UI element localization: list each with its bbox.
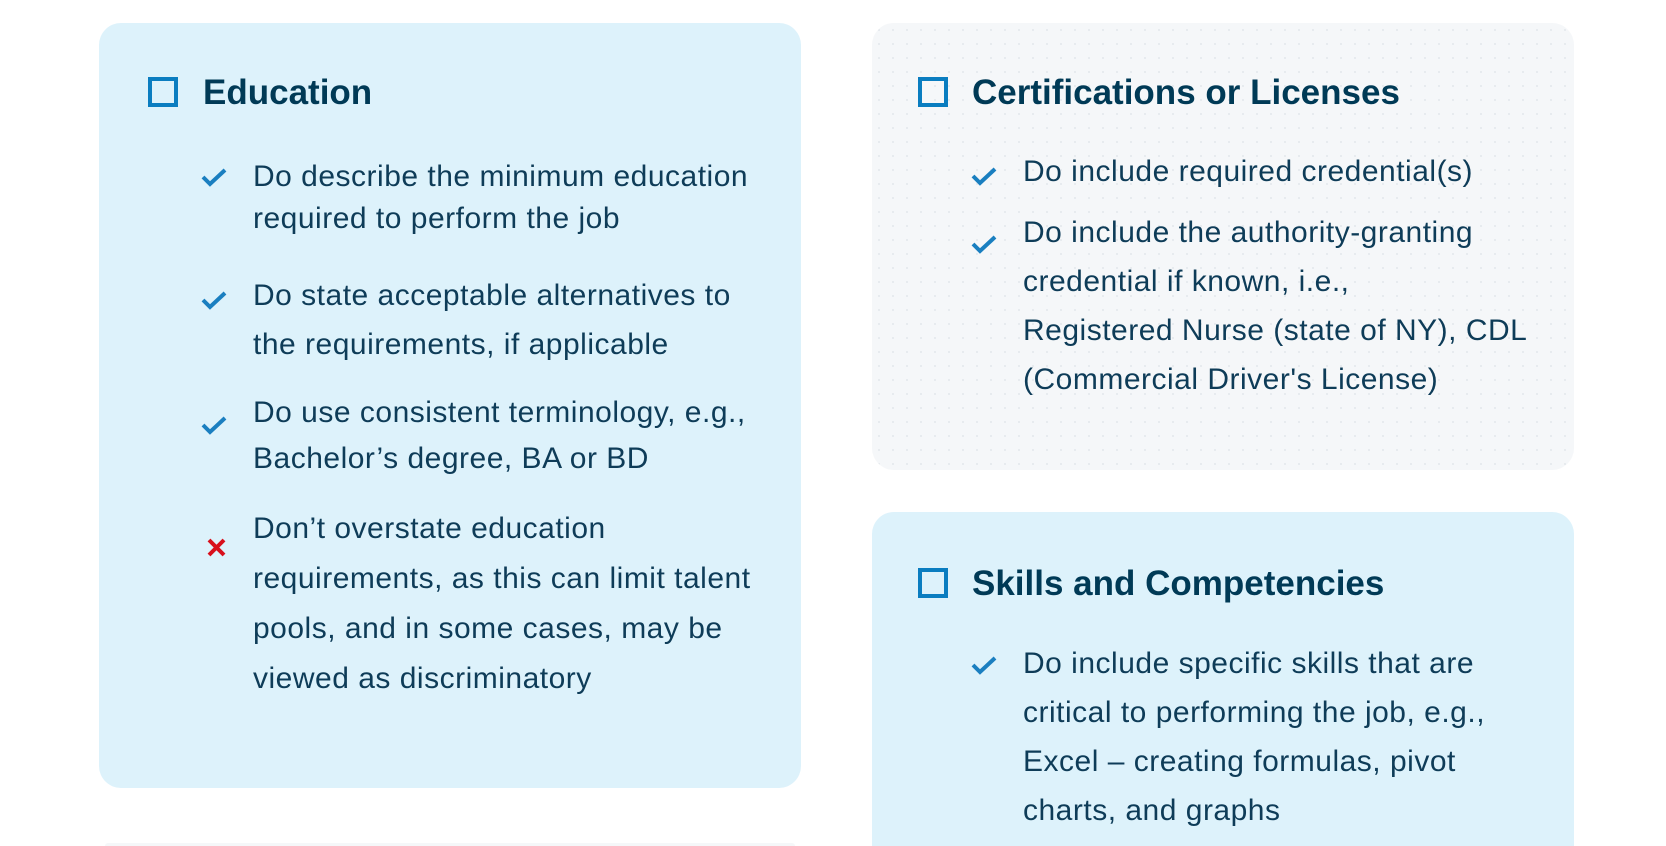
text: cert item 2: Do include the authority-granting [1023, 216, 1473, 249]
panel: skills [872, 512, 1574, 846]
text: cert item 2: Registered Nurse (state of NY), CDL [1023, 314, 1527, 347]
text: cert item 2: (Commercial Driver's License) [1023, 363, 1438, 396]
text: cert item 1: Do include required credential(s) [1023, 155, 1473, 188]
heading: skills: Skills and Competencies [972, 564, 1384, 603]
text: item 3 [253, 396, 746, 475]
text: item 4: viewed as discriminatory [253, 662, 592, 695]
text: item 4 [253, 512, 751, 695]
text: item 1 [253, 160, 748, 235]
panel: education [99, 23, 801, 788]
icon: check 3 [202, 416, 226, 435]
icon: checkbox certifications [918, 77, 948, 107]
text: item 3: Do use consistent terminology, e.g., [253, 396, 746, 429]
text: item 2 [253, 279, 731, 361]
icon: checkbox skills [918, 568, 948, 598]
text: skills item: charts, and graphs [1023, 794, 1280, 827]
icon: check cert 2 [972, 236, 996, 254]
text: item 4: pools, and in some cases, may be [253, 612, 723, 645]
icon: check cert 1 [972, 168, 996, 186]
text: item 2: Do state acceptable alternatives to [253, 279, 731, 312]
text: skills item: Excel – creating formulas, pivot [1023, 745, 1456, 778]
text: item 4: Don’t overstate education [253, 512, 606, 545]
panel: bottom left (partial) [105, 843, 795, 846]
panel: certifications [872, 23, 1574, 470]
text: item 3: Bachelor’s degree, BA or BD [253, 442, 649, 475]
text: item 1: Do describe the minimum education [253, 160, 748, 193]
text: skills item [1023, 647, 1485, 827]
icon: check skills [972, 656, 996, 675]
text: skills item: critical to performing the job, e.g., [1023, 696, 1485, 729]
text: skills item: Do include specific skills that are [1023, 647, 1474, 680]
icon: check 1 [202, 168, 226, 187]
text: item 2: the requirements, if applicable [253, 328, 669, 361]
heading: education: Education [203, 73, 372, 112]
text: cert item 2: credential if known, i.e., [1023, 265, 1350, 298]
icon: cross [208, 538, 226, 556]
text: cert item 2 [1023, 216, 1527, 396]
heading: certifications: Certifications or Licenses [972, 73, 1400, 112]
icon: checkbox education [148, 77, 178, 107]
icon: check 2 [202, 292, 226, 310]
text: item 4: requirements, as this can limit talent [253, 562, 751, 595]
text: item 1: required to perform the job [253, 202, 620, 235]
